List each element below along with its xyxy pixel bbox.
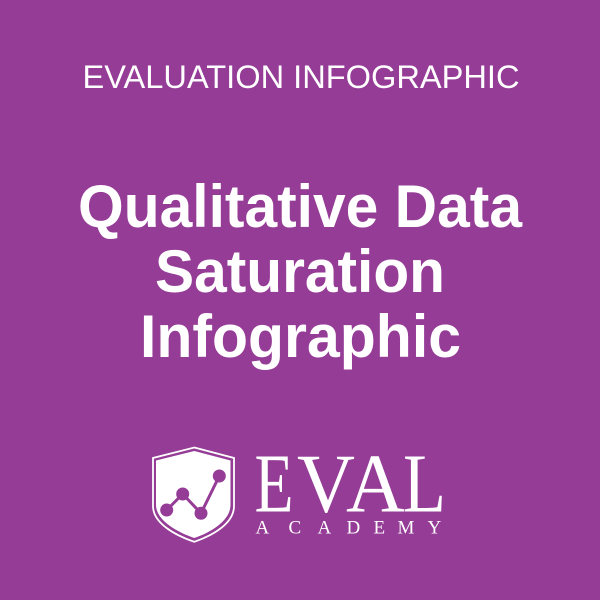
logo wordmark: eval: A [346,438,405,530]
logo wordmark: eval: E [254,438,294,530]
title [78,173,523,370]
logo wordmark: eval: V [297,438,355,530]
logo wordmark: academy: ACADEMY [256,518,442,538]
title: Saturation [155,238,445,305]
title: Qualitative Data [78,173,523,240]
logo: eval academy [153,438,446,542]
heading: evaluation infographic: EVALUATION INFOGRAPHIC [82,59,520,95]
logo wordmark: eval: L [403,438,446,530]
logo wordmark: eval [254,438,446,530]
title: Infographic [140,303,461,370]
icon: shield with line chart [153,448,234,542]
